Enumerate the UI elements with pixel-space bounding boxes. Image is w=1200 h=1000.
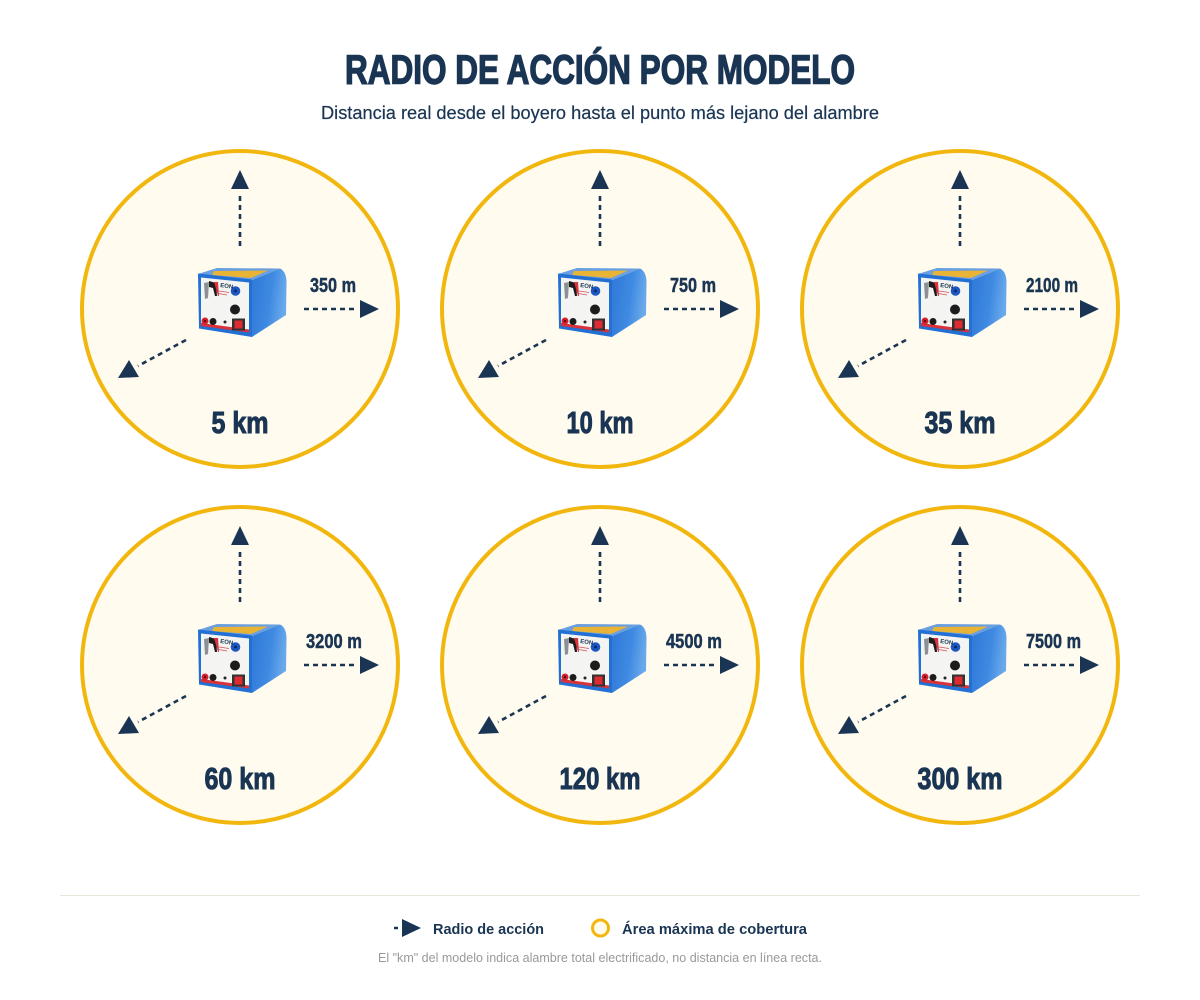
range label: 4500 m: [666, 631, 722, 653]
icon: boyero device: EON: [580, 283, 593, 291]
icon: boyero device: [918, 624, 1007, 693]
panel: 10 km: [442, 151, 758, 467]
arrow: up: [591, 526, 609, 602]
icon: boyero device: EON: [220, 283, 233, 291]
icon: boyero device: [198, 268, 287, 337]
icon: boyero device: [558, 268, 647, 337]
icon: boyero device: [198, 624, 287, 693]
arrow: up: [231, 526, 249, 602]
panel: 120 km: [442, 507, 758, 823]
icon: boyero device: EON: [940, 283, 953, 291]
range label: 7500 m: [1026, 631, 1081, 653]
range label: 2100 m: [1026, 275, 1078, 297]
range label: 350 m: [310, 275, 356, 297]
model label: 35 km: [924, 405, 996, 440]
legend: circle label: Área máxima de cobertura: [622, 921, 808, 938]
icon: boyero device: EON: [940, 639, 953, 647]
coverage circle: [442, 507, 758, 823]
coverage circle: [82, 151, 398, 467]
arrow: diagonal: [838, 340, 906, 378]
subtitle: Distancia real desde el boyero hasta el punto más lejano del alambre: [321, 102, 879, 123]
legend: arrow label: Radio de acción: [433, 921, 544, 938]
arrow: right: [664, 656, 739, 674]
title: RADIO DE ACCIÓN POR MODELO: [345, 46, 855, 92]
panel: 35 km: [802, 151, 1118, 467]
legend: arrow icon: [394, 919, 421, 937]
arrow: up: [951, 170, 969, 246]
arrow: right: [304, 656, 379, 674]
arrow: diagonal: [118, 340, 186, 378]
arrow: diagonal: [478, 340, 546, 378]
panel: 60 km: [82, 507, 398, 823]
arrow: diagonal: [838, 696, 906, 734]
arrow: up: [231, 170, 249, 246]
panel: 300 km: [802, 507, 1118, 823]
icon: boyero device: [918, 268, 1007, 337]
arrow: up: [591, 170, 609, 246]
coverage circle: [802, 507, 1118, 823]
arrow: right: [1024, 300, 1099, 318]
arrow: right: [664, 300, 739, 318]
model label: 10 km: [566, 405, 634, 440]
arrow: up: [951, 526, 969, 602]
panel: 5 km: [82, 151, 398, 467]
icon: boyero device: EON: [580, 639, 593, 647]
range label: 750 m: [670, 275, 716, 297]
model label: 5 km: [212, 405, 268, 440]
arrow: right: [1024, 656, 1099, 674]
arrow: diagonal: [118, 696, 186, 734]
footnote: El "km" del modelo indica alambre total electrificado, no distancia en línea recta.: [378, 951, 822, 965]
model label: 120 km: [560, 761, 640, 796]
arrow: right: [304, 300, 379, 318]
legend: circle icon: [592, 920, 608, 936]
icon: boyero device: EON: [220, 639, 233, 647]
model label: 300 km: [918, 761, 1002, 796]
legend: [394, 919, 808, 938]
arrow: diagonal: [478, 696, 546, 734]
model label: 60 km: [204, 761, 276, 796]
icon: boyero device: [558, 624, 647, 693]
range label: 3200 m: [306, 631, 362, 653]
coverage circle: [442, 151, 758, 467]
coverage circle: [802, 151, 1118, 467]
coverage circle: [82, 507, 398, 823]
